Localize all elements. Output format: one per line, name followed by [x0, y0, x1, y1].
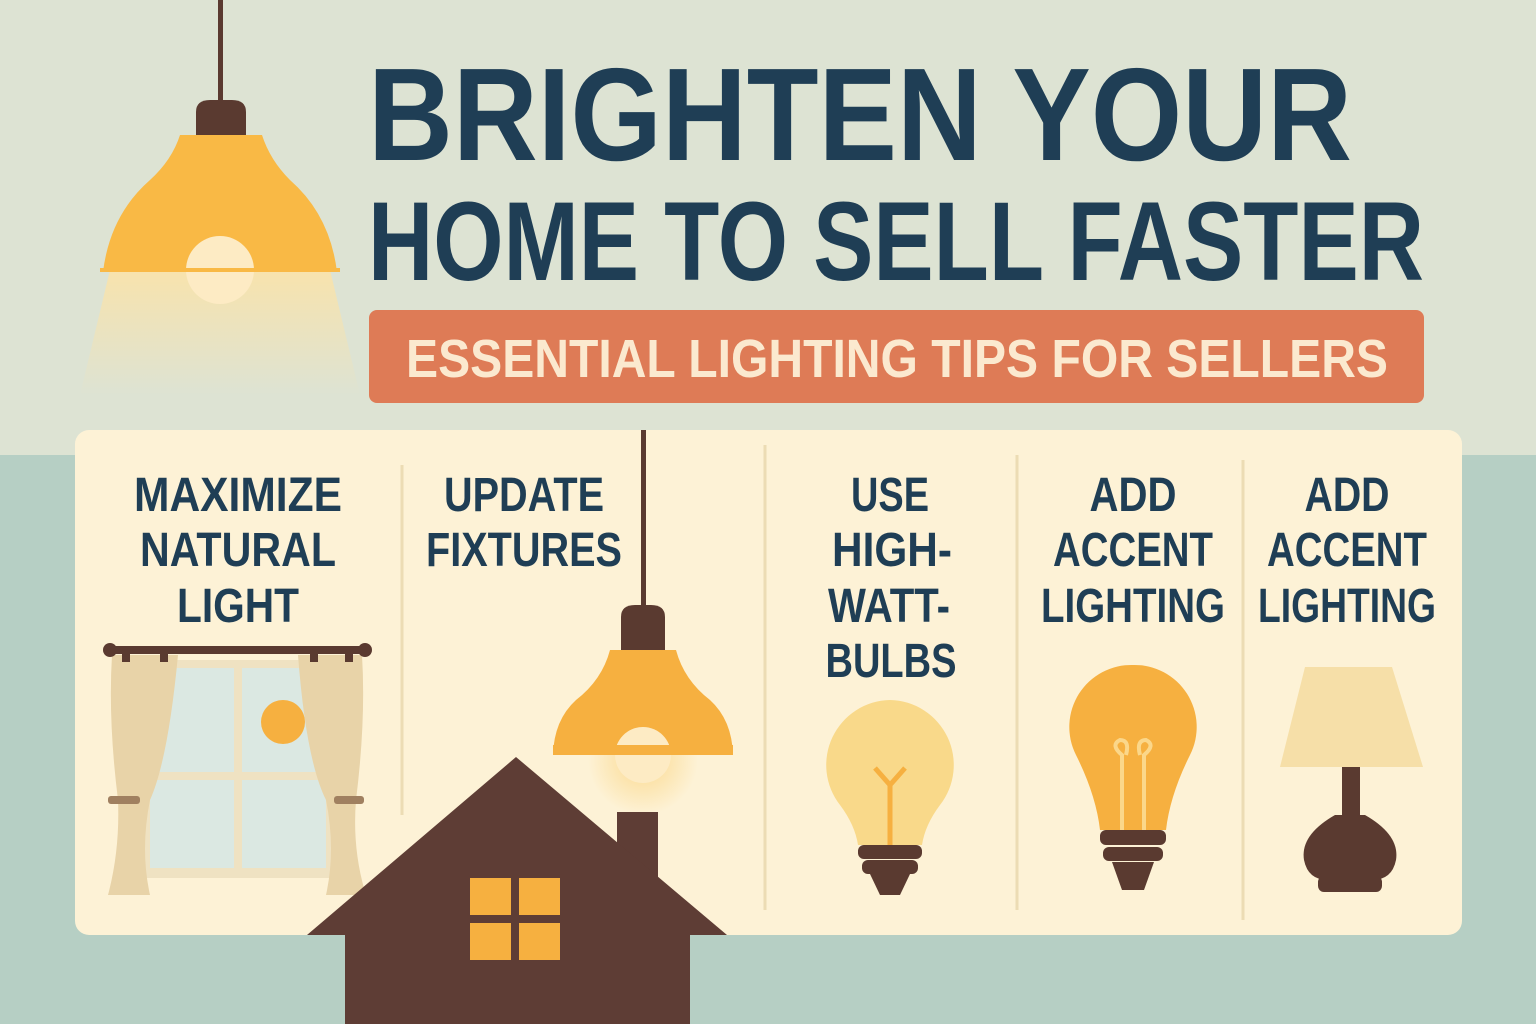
icon: table lamp: [1280, 667, 1423, 892]
icon: window with curtains: [103, 643, 372, 895]
heading: add accent lighting 1: LIGHTING: [1041, 580, 1225, 633]
title: [368, 41, 1424, 304]
heading: add accent lighting 2: ACCENT: [1267, 524, 1427, 577]
panel: tips: [75, 430, 1462, 935]
subtitle banner: ESSENTIAL LIGHTING TIPS FOR SELLERS: [406, 329, 1388, 389]
heading: add accent lighting 2: LIGHTING: [1258, 580, 1436, 633]
heading: maximize natural light: LIGHT: [177, 580, 299, 633]
icon: house: [307, 757, 727, 1024]
heading: add accent lighting 1: ADD: [1090, 469, 1176, 522]
heading: update fixtures: [426, 469, 622, 577]
heading: maximize natural light: [134, 469, 342, 633]
heading: use high-watt bulbs: HIGH-: [832, 524, 952, 577]
heading: update fixtures: FIXTURES: [426, 524, 622, 577]
icon: light bulb accent: [1069, 665, 1197, 890]
subtitle banner: [369, 310, 1424, 403]
heading: use high-watt bulbs: BULBS: [826, 635, 956, 688]
heading: use high-watt bulbs: [826, 469, 956, 688]
heading: maximize natural light: MAXIMIZE: [134, 469, 342, 522]
heading: add accent lighting 2: [1258, 469, 1436, 633]
heading: add accent lighting 2: ADD: [1304, 469, 1390, 522]
heading: use high-watt bulbs: USE: [851, 469, 929, 522]
icon: pendant lamp middle: [553, 430, 733, 815]
icon: pendant lamp top: [80, 0, 360, 395]
heading: maximize natural light: NATURAL: [140, 524, 336, 577]
heading: add accent lighting 1: [1041, 469, 1225, 633]
icon: light bulb high watt: [826, 700, 954, 895]
heading: update fixtures: UPDATE: [444, 469, 604, 522]
title: BRIGHTEN YOUR: [368, 41, 1352, 188]
heading: add accent lighting 1: ACCENT: [1053, 524, 1213, 577]
heading: use high-watt bulbs: WATT-: [828, 580, 950, 633]
